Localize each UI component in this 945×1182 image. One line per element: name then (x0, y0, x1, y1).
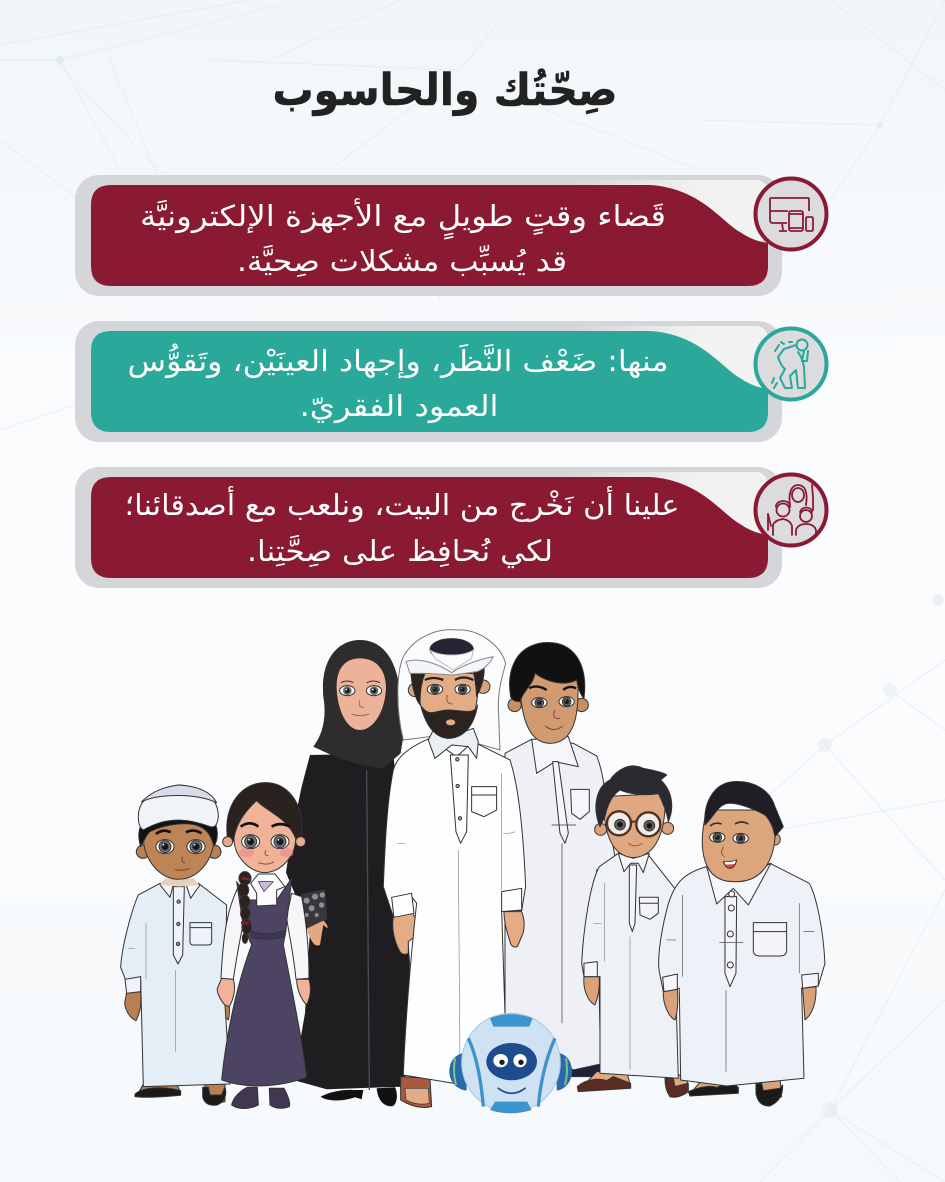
panel: go out and play (75, 467, 826, 588)
banner text (140, 197, 666, 278)
red banner (91, 185, 768, 286)
banner text (124, 485, 680, 569)
banner text: لكي نُحافِظ على صِحَّتِنا. (247, 534, 553, 569)
tall son (505, 642, 615, 1077)
icon: group of friends (756, 474, 826, 546)
red banner (91, 477, 768, 578)
girl with braid and pinafore (217, 783, 310, 1108)
mother in abaya (286, 640, 410, 1106)
banner text: علينا أن نَخْرج من البيت، ونلعب مع أصدقائنا؛ (124, 485, 680, 523)
banner text: قد يُسبِّب مشكلات صِحيَّة. (237, 244, 567, 278)
panel: health problems (75, 321, 826, 442)
teal banner (91, 331, 768, 432)
chubby boy (659, 781, 825, 1106)
panel frame (75, 321, 782, 442)
young boy in kufi (121, 785, 230, 1105)
banner text (128, 343, 668, 423)
panel frame (75, 175, 782, 296)
panel frame (75, 467, 782, 588)
banner text: قَضاء وقتٍ طويلٍ مع الأجهزة الإلكترونيَّة (140, 197, 666, 239)
banner text: منها: ضَعْف النَّظَر، وإجهاد العينَيْن، وتَقوُّس (128, 343, 668, 379)
robot mascot (449, 1013, 572, 1113)
icon: devices (756, 178, 826, 250)
boy with glasses (577, 766, 688, 1097)
icon: bent person with back pain (756, 328, 826, 400)
title: صِحّتُك والحاسوب (272, 65, 618, 116)
panel: long screen time warning (75, 175, 826, 296)
father in thobe and ghutra (383, 630, 526, 1107)
illustration: family of characters with robot (121, 630, 825, 1113)
banner text: العمود الفقريّ. (300, 389, 498, 423)
